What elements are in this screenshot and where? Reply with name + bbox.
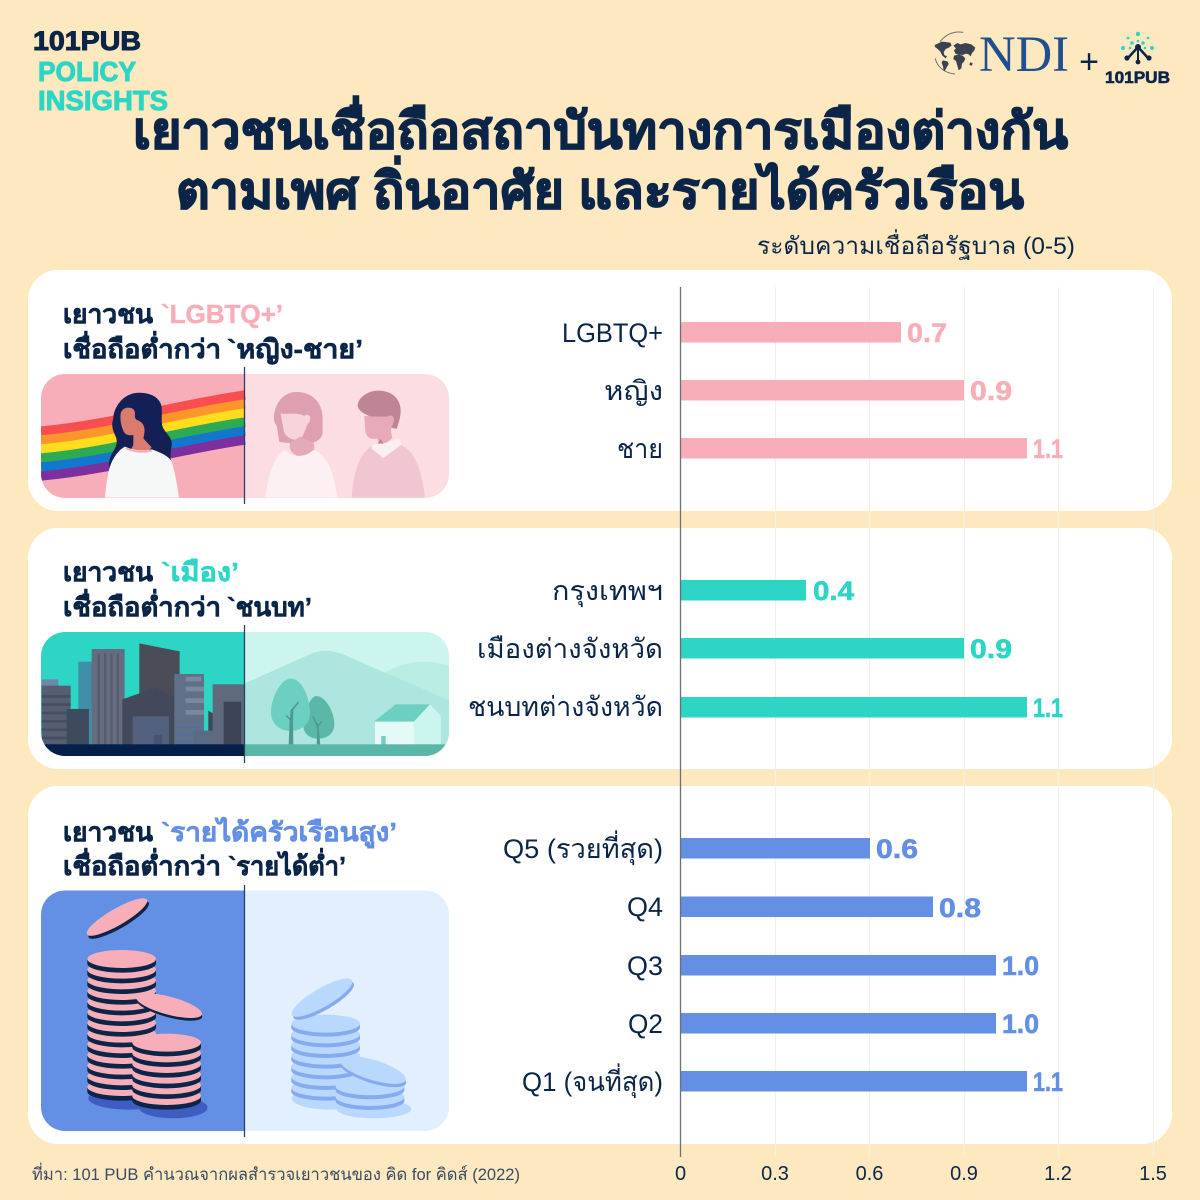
- heading: LGBTQ+ panel: `LGBTQ+’: [161, 299, 283, 329]
- logo: 101PUB Policy Insights: INSIGHTS: [38, 85, 168, 116]
- city: [30, 643, 244, 759]
- bar chart: income: 1.0: [1002, 951, 1039, 981]
- bar chart: income: 0.8: [939, 893, 981, 923]
- bar chart: income: 1.1: [1033, 1067, 1063, 1097]
- heading: LGBTQ+ panel: เชื่อถือต่ำกว่า: [63, 330, 221, 364]
- bar chart: gender: หญิง: [604, 376, 663, 406]
- x axis labels: 1.5: [1139, 1163, 1167, 1185]
- axis line: [680, 287, 682, 1157]
- bar chart: gender: ชาย: [617, 434, 663, 464]
- source note: ที่มา: 101 PUB คำนวณจากผลสำรวจเยาวชนของ คิด for คิดส์ (2022): [32, 1162, 520, 1184]
- person: LGBTQ+: [105, 393, 179, 498]
- heading: urban panel: [63, 557, 312, 622]
- bar chart: area: 0.4: [813, 576, 854, 606]
- heading: income panel: [63, 816, 397, 881]
- bar chart: area: ชนบทต่างจังหวัด: [468, 692, 663, 722]
- bar chart: area: กรุงเทพฯ: [552, 576, 663, 608]
- bar chart: area: 1.1: [1033, 693, 1063, 723]
- x axis labels: 0.3: [761, 1163, 789, 1185]
- x axis labels: 0: [675, 1163, 686, 1185]
- person: woman: [265, 392, 337, 498]
- icon: globe: [935, 32, 975, 74]
- heading: urban panel: เยาวชน: [63, 557, 153, 587]
- bar chart: area: เมืองต่างจังหวัด: [477, 634, 663, 664]
- bar chart: income: 0.6: [876, 834, 918, 864]
- heading: LGBTQ+ panel: เยาวชน: [63, 299, 153, 329]
- axis title: ระดับความเชื่อถือรัฐบาล (0-5): [757, 229, 1075, 260]
- x axis labels: 1.2: [1044, 1163, 1072, 1185]
- plus sign: +: [1079, 43, 1099, 81]
- illustration dividers: [244, 367, 246, 1137]
- panel: household income: [28, 786, 1172, 1144]
- x axis labels: 0.9: [950, 1163, 978, 1185]
- logo: 101PUB Policy Insights: 101PUB: [33, 26, 141, 56]
- title: ตามเพศ ถิ่นอาศัย และรายได้ครัวเรือน: [176, 156, 1024, 219]
- coins: high income: [83, 892, 208, 1118]
- logo: 101PUB Policy Insights: POLICY: [38, 56, 136, 87]
- x axis labels: [675, 1163, 1167, 1185]
- bar chart: area: 0.9: [970, 634, 1012, 664]
- person: man: [352, 391, 425, 498]
- countryside: [245, 651, 452, 759]
- logo: NDI: NDI: [979, 27, 1069, 83]
- x axis labels: 0.6: [856, 1163, 883, 1185]
- bar chart: gender: 0.9: [970, 376, 1012, 406]
- panel: urban rural: [28, 528, 1172, 769]
- bar chart: gender: 0.7: [907, 318, 947, 348]
- bar chart: income: Q4: [627, 892, 663, 922]
- bar chart: income: Q1 (จนที่สุด): [522, 1063, 663, 1099]
- heading: urban panel: `เมือง’: [161, 557, 239, 587]
- icon: network dots: [1121, 32, 1154, 64]
- heading: income panel: เยาวชน: [63, 817, 153, 847]
- bar chart: income: Q5 (รวยที่สุด): [503, 830, 663, 866]
- bar chart: gender: LGBTQ+: [562, 318, 663, 348]
- bar chart: income: 1.0: [1002, 1009, 1039, 1039]
- bar chart: area: [468, 576, 1063, 723]
- bar chart: income: [503, 830, 1063, 1099]
- heading: LGBTQ+ panel: [63, 299, 363, 365]
- bar chart: gender: [562, 318, 1063, 464]
- bar chart: gender: 1.1: [1033, 434, 1063, 464]
- heading: income panel: `รายได้ครัวเรือนสูง’: [161, 816, 397, 849]
- logo: NDI: [935, 27, 1069, 83]
- coins: low income: [287, 972, 411, 1118]
- heading: urban panel: `ชนบท’: [227, 592, 312, 622]
- bar chart: income: Q3: [627, 951, 663, 981]
- panel: LGBTQ+ gender: [28, 270, 1172, 511]
- title: เยาวชนเชื่อถือสถาบันทางการเมืองต่างกัน: [133, 96, 1068, 159]
- heading: income panel: เชื่อถือต่ำกว่า: [63, 847, 221, 881]
- illustration: city and countryside: [30, 632, 452, 759]
- logo: 101PUB small: 101PUB: [1105, 68, 1170, 87]
- heading: urban panel: เชื่อถือต่ำกว่า: [63, 588, 221, 622]
- heading: income panel: `รายได้ต่ำ’: [228, 847, 346, 881]
- rainbow: [41, 395, 245, 476]
- illustration: coin stacks: [41, 890, 449, 1131]
- heading: LGBTQ+ panel: `หญิง-ชาย’: [227, 334, 363, 365]
- logo: 101PUB Policy Insights: [33, 26, 168, 116]
- title: [133, 96, 1068, 219]
- illustration: rainbow and people: [41, 374, 449, 498]
- bar chart: income: Q2: [628, 1009, 663, 1039]
- logo: 101PUB small: [1105, 32, 1170, 87]
